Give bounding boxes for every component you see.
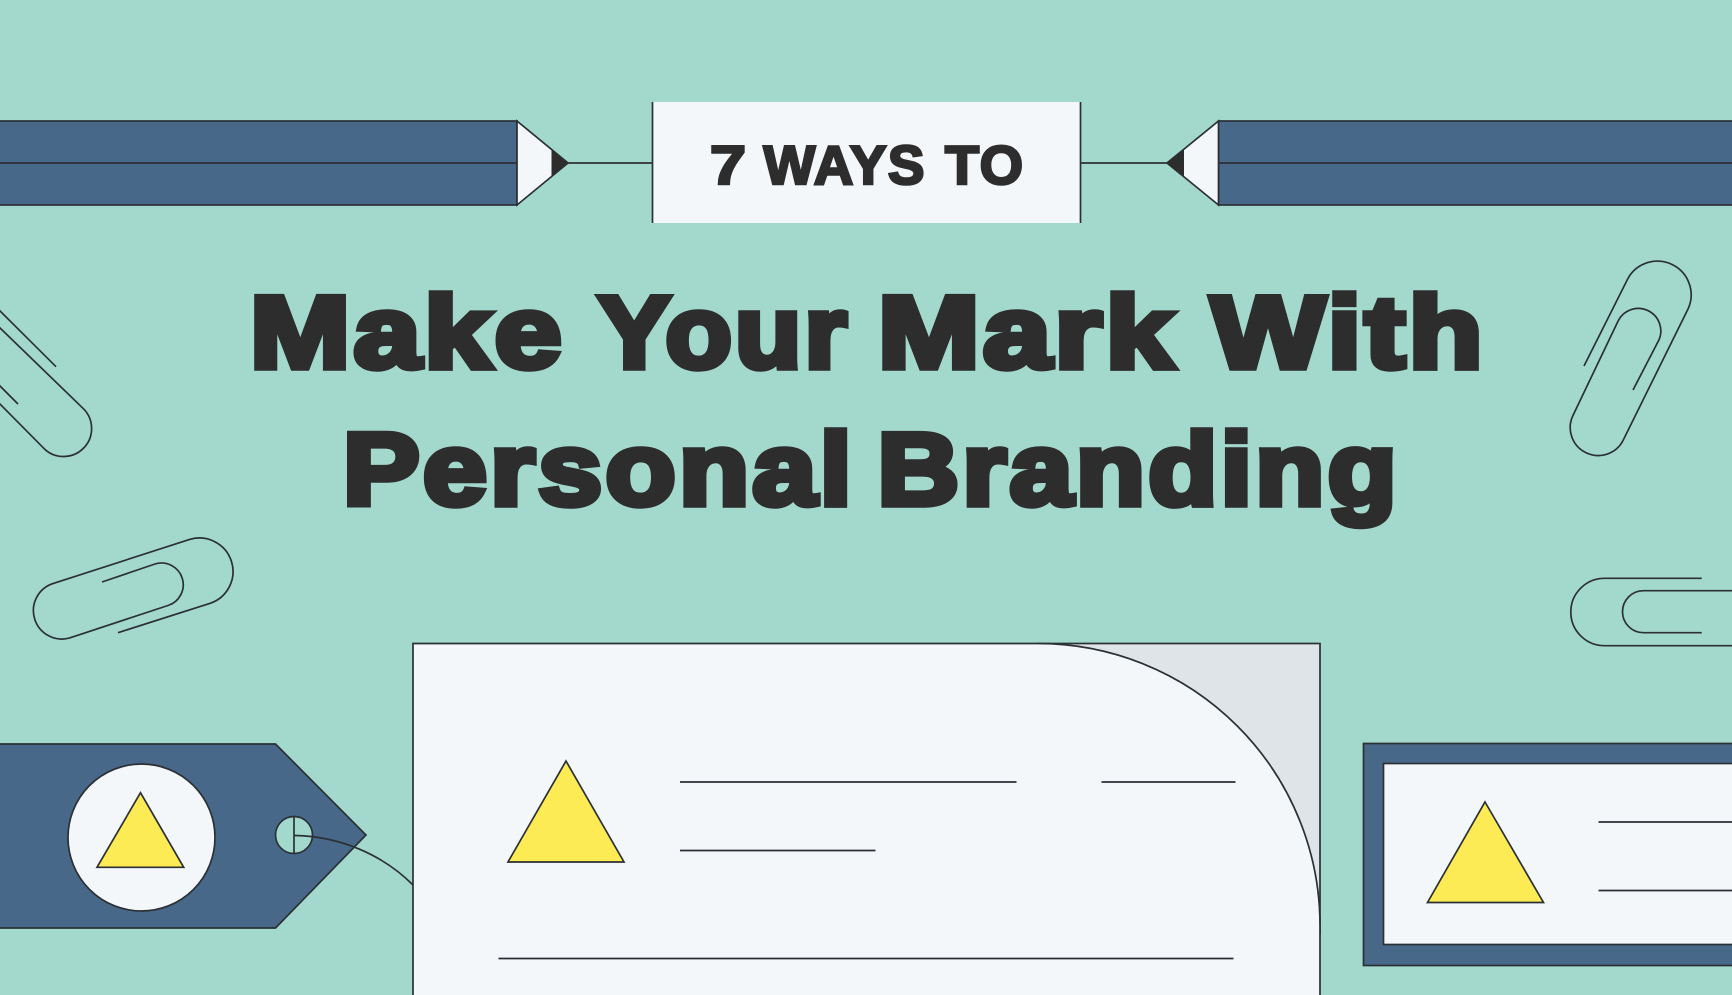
heading banner: 7 ways to bbox=[652, 102, 1080, 223]
heading banner: 7 ways to: TO bbox=[945, 134, 1024, 196]
heading banner: 7 ways to: 7 bbox=[710, 134, 746, 196]
title: Make bbox=[250, 276, 565, 390]
icon: card triangle logo bbox=[1428, 802, 1544, 902]
title: Mark bbox=[878, 276, 1177, 390]
icon: paperclip lower right bbox=[1571, 578, 1732, 646]
title: Your bbox=[598, 276, 850, 390]
icon: document triangle logo bbox=[508, 761, 624, 862]
title: Personal bbox=[343, 412, 855, 526]
text lines on card bbox=[1598, 822, 1732, 890]
panel: document with folded corner bbox=[413, 644, 1320, 995]
title bbox=[250, 276, 1486, 526]
icon: paperclip top left bbox=[0, 308, 92, 457]
icon: paperclip top right bbox=[1570, 261, 1691, 456]
icon: price tag bbox=[0, 744, 413, 928]
panel: business card bbox=[1364, 744, 1732, 966]
icon: right pencil bbox=[1080, 121, 1732, 205]
icon: left pencil bbox=[0, 121, 653, 205]
heading banner: 7 ways to: WAYS bbox=[764, 134, 926, 196]
icon: paperclip lower left bbox=[33, 538, 233, 639]
title: Branding bbox=[878, 412, 1400, 526]
text lines on document bbox=[498, 782, 1236, 958]
title: With bbox=[1211, 276, 1486, 390]
